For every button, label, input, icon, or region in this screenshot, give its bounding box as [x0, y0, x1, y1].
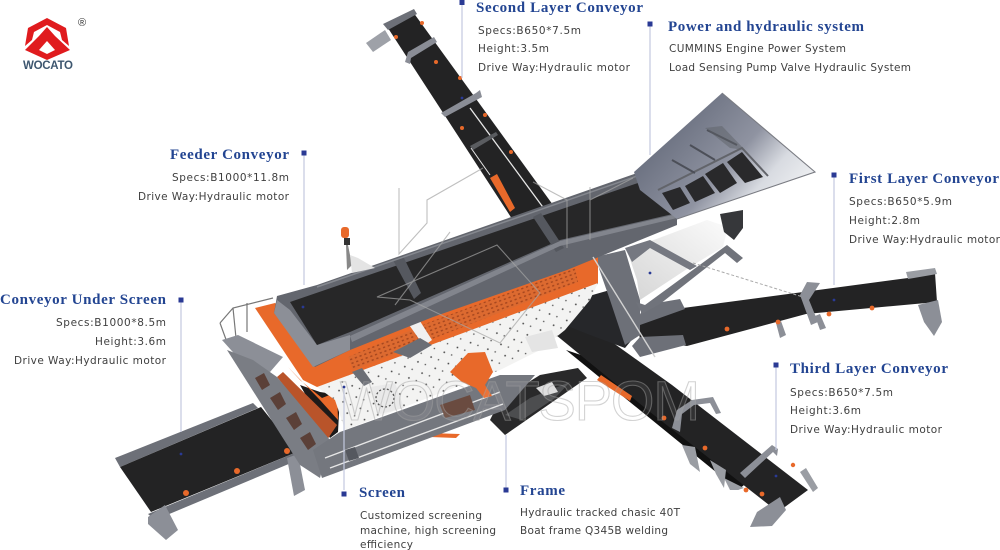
callout: Screen: machine, high screening [360, 525, 496, 537]
callout: First Layer Conveyor [832, 171, 1000, 301]
cable and rod [693, 263, 803, 297]
callout: Second Layer Conveyor: Second Layer Conveyor [476, 0, 643, 16]
callout: Feeder Conveyor: Specs:B1000*11.8m [172, 172, 289, 184]
callout: Frame [504, 435, 681, 537]
callout: Power and hydraulic system: CUMMINS Engine Power System [669, 43, 846, 55]
callout: Second Layer Conveyor: Height:3.5m [478, 43, 549, 55]
first layer conveyor [632, 268, 942, 357]
callout: Screen [342, 386, 496, 550]
callout: Power and hydraulic system [648, 19, 911, 274]
callout: Feeder Conveyor: Feeder Conveyor [170, 147, 289, 163]
callout: Screen: Customized screening [360, 510, 482, 522]
machine illustration [115, 9, 942, 540]
callout: Power and hydraulic system: Load Sensing Pump Valve Hydraulic System [669, 62, 911, 74]
callout: Power and hydraulic system: Power and hydraulic system [668, 19, 864, 35]
callout: Conveyor Under Screen [0, 292, 184, 455]
second layer conveyor [366, 9, 553, 222]
watermark [340, 168, 700, 432]
callout: Screen: Screen [359, 485, 406, 501]
hydraulic tank [625, 210, 743, 314]
callout: Frame: Boat frame Q345B welding [520, 525, 668, 537]
conveyor under screen [115, 403, 305, 540]
callout: Frame: Hydraulic tracked chasic 40T [520, 507, 681, 519]
callout: Second Layer Conveyor: Specs:B650*7.5m [478, 25, 581, 37]
callout: Third Layer Conveyor [774, 361, 948, 477]
third layer conveyor [556, 317, 818, 527]
screen [255, 250, 598, 430]
frame: tracked chassis [490, 368, 587, 435]
rod [593, 257, 655, 357]
logo: WOCATO: WOCATO [23, 60, 73, 72]
callout: First Layer Conveyor: Drive Way:Hydraulic motor [849, 234, 1000, 246]
callout: Conveyor Under Screen: Conveyor Under Screen [0, 292, 167, 308]
watermark: WOCATSPOM [340, 369, 700, 432]
vibration motor [450, 352, 493, 398]
callout: Third Layer Conveyor: Drive Way:Hydraulic motor [790, 424, 943, 436]
hopper [634, 93, 815, 219]
callout: Third Layer Conveyor: Third Layer Conveyor [790, 361, 948, 377]
side walkway [220, 298, 535, 478]
callout: Frame: Frame [520, 483, 565, 499]
callout: First Layer Conveyor: Specs:B650*5.9m [849, 196, 952, 208]
callout: Conveyor Under Screen: Drive Way:Hydraulic motor [14, 355, 167, 367]
callout: Conveyor Under Screen: Height:3.6m [95, 336, 166, 348]
logo: WOCATO [23, 17, 86, 72]
callout: Second Layer Conveyor: Drive Way:Hydraulic motor [478, 62, 631, 74]
callout: Feeder Conveyor: Drive Way:Hydraulic motor [138, 191, 290, 203]
callout: First Layer Conveyor: Height:2.8m [849, 215, 920, 227]
warning beacon [341, 227, 375, 273]
feeder conveyor [274, 172, 677, 386]
callout: Third Layer Conveyor: Height:3.6m [790, 405, 861, 417]
callout: Third Layer Conveyor: Specs:B650*7.5m [790, 387, 893, 399]
callout: Conveyor Under Screen: Specs:B1000*8.5m [56, 317, 166, 329]
callout: First Layer Conveyor: First Layer Conveyor [849, 171, 999, 187]
callout: Second Layer Conveyor [460, 0, 643, 99]
central structure [565, 250, 640, 348]
callout: Feeder Conveyor [138, 147, 306, 308]
logo: WOCATO: ® [78, 17, 86, 29]
